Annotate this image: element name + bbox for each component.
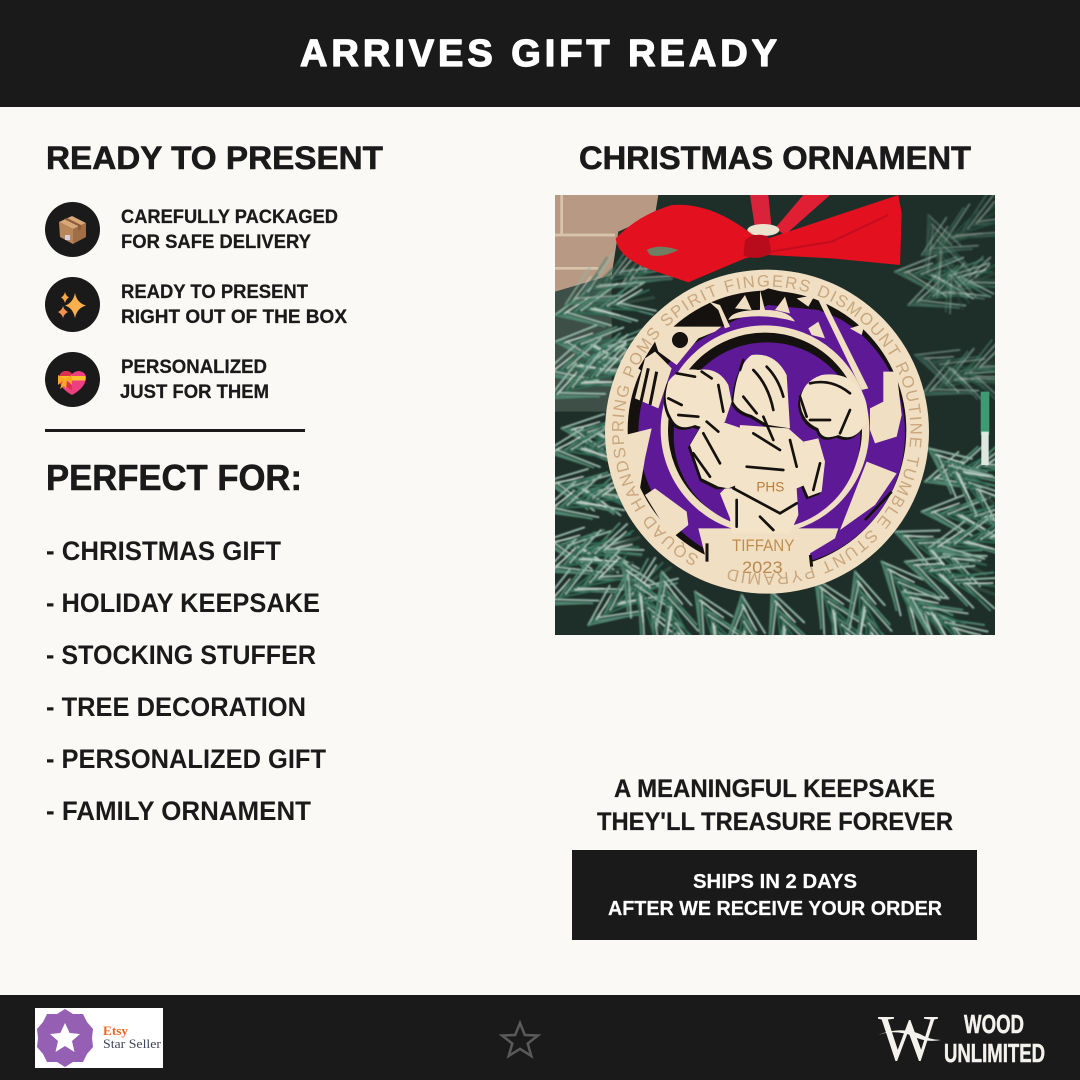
callout: shipping box: AFTER WE RECEIVE YOUR ORDER xyxy=(608,898,943,920)
title: ARRIVES GIFT READY xyxy=(300,33,777,75)
feature: ready to present xyxy=(45,277,347,332)
icon: gift heart xyxy=(58,371,86,395)
photo: wooden cheerleader ornament xyxy=(555,195,995,635)
feature: personalized: JUST FOR THEM xyxy=(120,382,269,403)
heading: ready to present: READY TO PRESENT xyxy=(46,140,383,176)
ornament xyxy=(605,270,929,594)
list: occasions: - CHRISTMAS GIFT xyxy=(46,536,281,566)
feature: ready to present: READY TO PRESENT xyxy=(121,282,308,303)
list: occasions: - FAMILY ORNAMENT xyxy=(46,796,311,826)
engraved outer text: SQUAD HANDSPRING POMS SPIRIT FINGERS DISMOUNT ROUTINE TUMBLE STUNT PYRAMID xyxy=(612,275,922,585)
red ribbon bow xyxy=(616,195,902,282)
engraved: name and year: TIFFANY xyxy=(732,536,794,555)
engraved: PHS: PHS xyxy=(756,479,784,495)
callout: keepsake message xyxy=(597,775,953,836)
badge: etsy star seller: Etsy xyxy=(103,1023,129,1038)
feature: packaged: CAREFULLY PACKAGED xyxy=(121,207,338,228)
cheerleader figure xyxy=(664,355,867,533)
list: occasions: - PERSONALIZED GIFT xyxy=(46,744,326,774)
icon: box xyxy=(59,216,86,244)
pine needles xyxy=(555,195,995,635)
heading: perfect for: PERFECT FOR: xyxy=(46,457,302,498)
icon: footer star xyxy=(502,1023,538,1056)
badge: etsy star seller xyxy=(35,1008,163,1068)
header band xyxy=(0,0,1080,107)
callout: shipping box: SHIPS IN 2 DAYS xyxy=(693,871,857,893)
list: occasions: - HOLIDAY KEEPSAKE xyxy=(46,588,320,618)
icon: sparkles xyxy=(58,292,86,318)
panel: ready to present xyxy=(45,140,383,407)
badge: etsy star seller: Star Seller xyxy=(103,1036,162,1051)
callout: shipping box xyxy=(572,850,977,940)
panel: perfect for xyxy=(46,457,326,826)
callout: keepsake message: THEY'LL TREASURE FOREVER xyxy=(597,808,953,836)
feature: personalized: PERSONALIZED xyxy=(121,357,267,378)
list: occasions: - STOCKING STUFFER xyxy=(46,640,316,670)
inner ring xyxy=(664,329,866,530)
heading: christmas ornament: CHRISTMAS ORNAMENT xyxy=(579,140,971,176)
footer band xyxy=(0,995,1080,1080)
engraved: name and year: 2023 xyxy=(742,558,783,577)
feature: packaged xyxy=(45,202,338,257)
logo: wood unlimited: W xyxy=(878,1002,939,1075)
logo: wood unlimited: WOOD xyxy=(964,1009,1024,1039)
list: occasions xyxy=(46,536,326,826)
callout: keepsake message: A MEANINGFUL KEEPSAKE xyxy=(614,775,935,803)
logo: wood unlimited xyxy=(878,1002,1045,1075)
feature: packaged: FOR SAFE DELIVERY xyxy=(121,232,311,253)
list: occasions: - TREE DECORATION xyxy=(46,692,306,722)
feature: ready to present: RIGHT OUT OF THE BOX xyxy=(121,307,347,328)
feature: personalized xyxy=(45,352,269,407)
engraved: name and year xyxy=(732,540,794,573)
